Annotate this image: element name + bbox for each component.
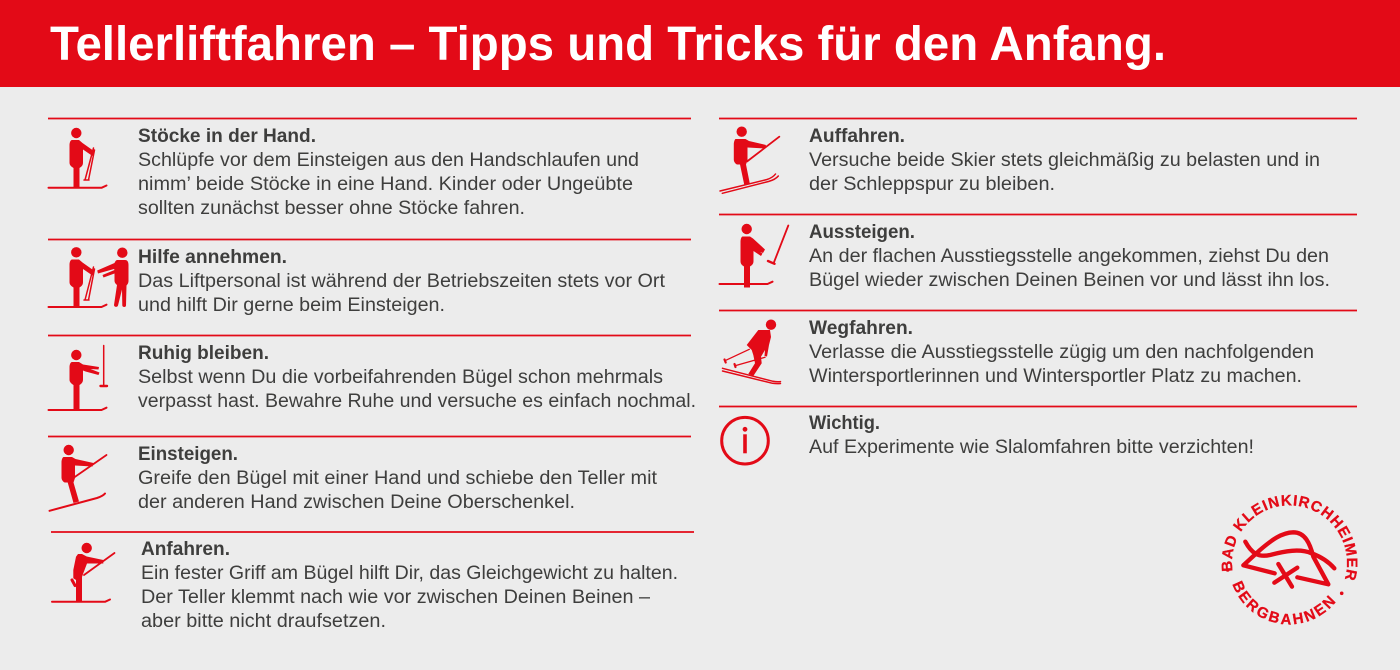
text: Stöcke in der Hand: Stöcke in der Hand. xyxy=(138,126,316,147)
text: Ruhig bleiben: Selbst wenn Du die vorbeifahrenden Bügel schon mehrmals xyxy=(138,367,663,388)
text: Ruhig bleiben xyxy=(138,343,696,412)
text: Aussteigen xyxy=(809,222,1330,291)
icon: skier holding poles xyxy=(48,128,106,188)
panel: Ruhig bleiben xyxy=(48,336,696,412)
text: Wichtig: Wichtig. xyxy=(809,413,880,434)
text: Auffahren: der Schleppspur zu bleiben. xyxy=(809,174,1055,195)
text: Aussteigen: An der flachen Ausstiegsstelle angekommen, ziehst Du den xyxy=(809,246,1329,267)
panel: Wegfahren xyxy=(719,310,1357,387)
text: Anfahren: Anfahren. xyxy=(141,539,230,560)
text: Anfahren: Ein fester Griff am Bügel hilft Dir, das Gleichgewicht zu halten. xyxy=(141,563,678,584)
title banner xyxy=(0,0,1400,87)
text: Stöcke in der Hand: sollten zunächst besser ohne Stöcke fahren. xyxy=(138,198,525,219)
panel: Anfahren xyxy=(51,532,694,632)
text: Wichtig xyxy=(809,413,1254,458)
icon: skier riding off xyxy=(52,543,114,602)
text: Einsteigen: Einsteigen. xyxy=(138,444,238,465)
text: Einsteigen xyxy=(138,444,658,513)
icon: skier skiing away xyxy=(722,320,780,384)
panel: Auffahren xyxy=(719,118,1357,195)
text: Einsteigen: Greife den Bügel mit einer Hand und schiebe den Teller mit xyxy=(138,468,658,489)
text: Anfahren xyxy=(141,539,678,632)
text: Wichtig: Auf Experimente wie Slalomfahren bitte verzichten! xyxy=(809,437,1254,458)
logo text bottom: BERGBAHNEN xyxy=(1232,580,1336,625)
panel: Wichtig xyxy=(719,406,1357,464)
icon: skier boarding the lift xyxy=(50,445,106,511)
text: Stöcke in der Hand: Schlüpfe vor dem Einsteigen aus den Handschlaufen und xyxy=(138,150,639,171)
text: Stöcke in der Hand xyxy=(138,126,639,219)
icon: skier with lift attendant xyxy=(48,247,128,307)
logo text top: BAD KLEINKIRCHHEIMER xyxy=(1222,494,1358,580)
text: Auffahren xyxy=(809,126,1320,195)
text: Hilfe annehmen: Das Liftpersonal ist während der Betriebszeiten stets vor Ort xyxy=(138,271,666,292)
panel: Aussteigen xyxy=(719,214,1357,291)
icon: information xyxy=(722,417,768,464)
panel: Einsteigen xyxy=(48,436,691,513)
text: Stöcke in der Hand: nimm’ beide Stöcke in eine Hand. Kinder oder Ungeübte xyxy=(138,174,633,195)
panel: Hilfe annehmen xyxy=(48,240,691,316)
text: Anfahren: aber bitte nicht draufsetzen. xyxy=(141,611,386,632)
panel: Stöcke in der Hand xyxy=(48,118,691,219)
text: Einsteigen: der anderen Hand zwischen Deine Oberschenkel. xyxy=(138,492,575,513)
text: Ruhig bleiben: Ruhig bleiben. xyxy=(138,343,269,364)
text: Ruhig bleiben: verpasst hast. Bewahre Ruhe und versuche es einfach nochmal. xyxy=(138,391,696,412)
icon: skier releasing the lift xyxy=(720,224,788,288)
text: Wegfahren xyxy=(809,318,1314,387)
text: Auffahren: Versuche beide Skier stets gleichmäßig zu belasten und in xyxy=(809,150,1320,171)
text: Aussteigen: Aussteigen. xyxy=(809,222,915,243)
title: Tellerliftfahren – Tipps und Tricks für den Anfang. xyxy=(50,18,1166,71)
text: Hilfe annehmen: Hilfe annehmen. xyxy=(138,247,287,268)
text: Anfahren: Der Teller klemmt nach wie vor zwischen Deinen Beinen – xyxy=(141,587,650,608)
icon: skier waiting at lift xyxy=(48,346,107,410)
text: Aussteigen: Bügel wieder zwischen Deinen Beinen vor und lässt ihn los. xyxy=(809,270,1330,291)
logo mountain mark xyxy=(1243,532,1334,587)
text: Auffahren: Auffahren. xyxy=(809,126,905,147)
text: Wegfahren: Wegfahren. xyxy=(809,318,913,339)
logo: Bad Kleinkirchheimer Bergbahnen xyxy=(1222,494,1358,625)
text: Wegfahren: Wintersportlerinnen und Wintersportler Platz zu machen. xyxy=(809,366,1302,387)
text: Wegfahren: Verlasse die Ausstiegsstelle zügig um den nachfolgenden xyxy=(809,342,1314,363)
icon: skier riding uphill xyxy=(720,126,779,193)
text: Hilfe annehmen xyxy=(138,247,666,316)
text: Hilfe annehmen: und hilft Dir gerne beim Einsteigen. xyxy=(138,295,445,316)
